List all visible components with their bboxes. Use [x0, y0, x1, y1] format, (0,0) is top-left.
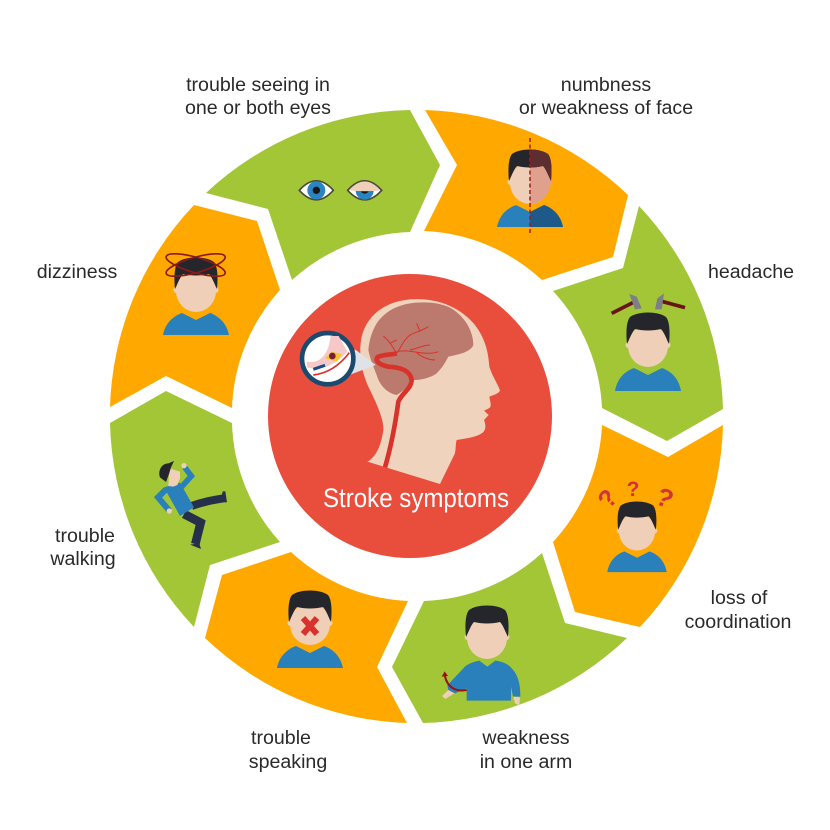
heading: Stroke symptoms: Stroke symptoms: [323, 483, 509, 513]
head silhouette: [360, 299, 500, 484]
illustration: head with brain and artery: [302, 299, 500, 484]
label: numbness: numbness: [561, 74, 651, 96]
icon: person with crossed mouth: [277, 590, 343, 668]
label: loss of coordination: coordination: [685, 611, 791, 633]
magnifier lens: [302, 333, 353, 384]
panel: dizziness: [110, 205, 280, 408]
icon: eyes: [299, 181, 382, 200]
panel: headache: [553, 206, 723, 441]
label: trouble walking: trouble: [55, 525, 115, 547]
icon: person with weak arm: [442, 661, 520, 705]
label: trouble speaking: speaking: [249, 751, 327, 773]
central circle: [268, 274, 552, 558]
label: trouble speaking: trouble: [251, 727, 311, 749]
icon: confused person: [607, 501, 667, 572]
panel: loss of coordination: [553, 425, 723, 627]
icon: question marks: [592, 478, 678, 515]
icon: half-numb face person: [497, 138, 563, 235]
panel: trouble walking: [110, 391, 280, 627]
icon: hammers hitting head: [612, 293, 685, 313]
artery: [377, 353, 412, 467]
panel: numbness of face: [424, 110, 628, 280]
label: trouble walking: walking: [49, 548, 116, 570]
icon: question marks: ?: [592, 484, 624, 514]
icon: question marks: ?: [651, 481, 678, 515]
icon: dizzy person: [163, 258, 229, 335]
icon: person with headache: [615, 312, 681, 391]
label: headache: headache: [708, 261, 794, 283]
icon: head of person: [464, 606, 510, 659]
label: trouble seeing: one or both eyes: [185, 97, 331, 119]
panel: weakness in one arm: [392, 553, 627, 723]
panel: trouble speaking: [205, 552, 408, 723]
label: trouble seeing: trouble seeing in: [186, 74, 330, 96]
label: dizziness: dizziness: [37, 261, 117, 283]
label: weakness in one arm: in one arm: [480, 751, 572, 773]
panel: trouble seeing: [206, 110, 440, 280]
label: numbness: or weakness of face: [519, 97, 693, 119]
label: loss of coordination: loss of: [711, 587, 768, 609]
icon: dizzy orbits: [164, 249, 227, 281]
brain: [368, 302, 473, 395]
magnifier cone: [349, 349, 376, 375]
artery branches: [383, 323, 438, 360]
icon: stumbling man: [158, 461, 227, 549]
blood vessel detail: [307, 336, 349, 375]
label: weakness in one arm: weakness: [481, 727, 570, 749]
icon: question marks: ?: [627, 478, 639, 501]
